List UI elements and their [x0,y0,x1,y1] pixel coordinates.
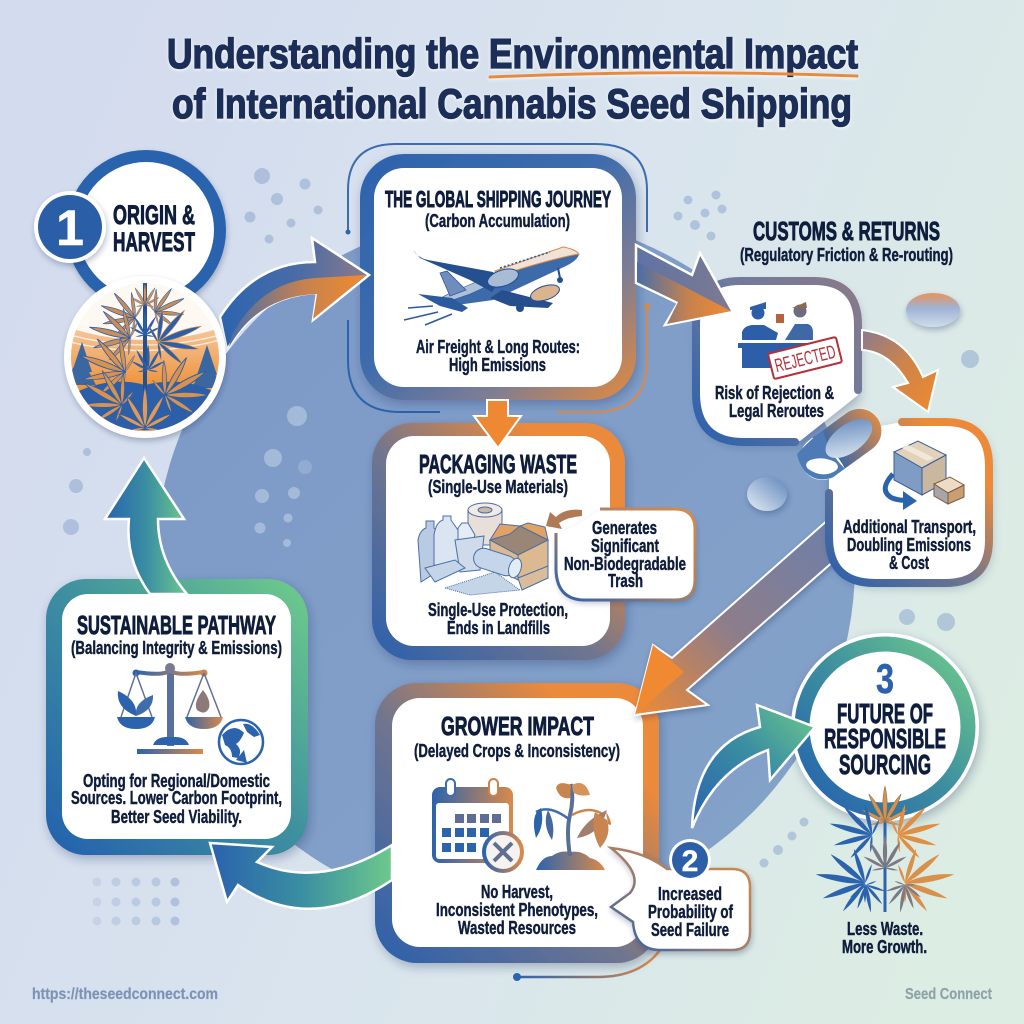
central circle backdrop [155,215,855,915]
heading: grower: GROWER IMPACT [441,711,594,741]
caption: packaging: Ends in Landfills [447,618,550,638]
subheading: shipping: (Carbon Accumulation) [425,211,570,231]
title: Understanding the Environmental Impact [167,30,858,77]
icon: globe [219,720,263,764]
caption: shipping: High Emissions [449,355,546,375]
decorative dots [63,168,979,926]
arrow: grower to future [692,705,815,828]
subheading: packaging: (Single-Use Materials) [428,477,568,497]
panel: additional transport [829,422,989,583]
caption: sustainable: Sources. Lower Carbon Footprint, [71,788,282,808]
decorative blob centre right [747,477,787,511]
badge: number 2: 2 [682,845,698,878]
heading: future: FUTURE OF [837,698,933,729]
callout text: trash [564,518,686,591]
callout text: trash: Trash [608,571,643,591]
heading: future: SOURCING [839,749,931,780]
callout text: seed failure: Increased [658,884,722,904]
caption: packaging: Single-Use Protection, [428,600,568,620]
circle: origin and harvest [34,156,220,304]
connector blob between customs and additional panels [791,400,890,489]
thin line below grower panel [513,950,660,981]
caption: packaging [428,600,568,638]
caption: sustainable [71,771,282,827]
decorative blob upper right [906,293,960,327]
arrow: sustainable to origin [105,458,187,594]
icon: wilted plant [534,783,611,870]
caption: sustainable: Opting for Regional/Domestic [83,771,270,791]
callout: seed failure [611,839,750,950]
number 3: 3 [876,655,894,702]
caption: customs [715,383,834,421]
illustration: cannabis field roundel [64,276,226,440]
caption: grower [436,882,598,938]
panel: sustainable pathway [46,579,308,855]
arrow: shipping to customs [636,245,733,325]
panel: packaging waste [372,423,625,660]
callout text: seed failure [648,884,734,940]
panel: global shipping journey [360,154,636,400]
heading: sustainable: SUSTAINABLE PATHWAY [77,610,276,640]
heading: future: RESPONSIBLE [824,723,946,754]
callout: non-biodegradable trash [546,509,695,600]
arrow: callout pointer [546,510,582,529]
arrow: additional transport to grower [635,518,835,715]
tagline [842,919,927,957]
icon: customs officers at desk [738,302,813,368]
title: of International Cannabis Seed Shipping [172,80,852,127]
tagline: More Growth. [842,937,927,957]
arrow: customs to additional [862,330,938,412]
icon: airplane [404,247,579,325]
title [167,30,858,127]
icon: packaging pile [418,503,548,595]
icon: boxes and return arrow [885,441,964,510]
stamp: rejected: REJECTED [773,342,838,377]
heading: origin: HARVEST [113,227,195,257]
caption: sustainable: Better Seed Viability. [111,807,242,827]
arrow: grower to sustainable [210,843,392,909]
caption: customs: Risk of Rejection & [715,383,834,403]
footer: url: https://theseedconnect.com [32,986,218,1003]
caption: additional transport: Doubling Emissions [847,535,971,555]
tagline: Less Waste. [847,919,923,939]
badge: number 1: 1 [56,200,84,256]
panel: customs and returns [696,216,953,442]
thin bracket lines around shipping panel [346,144,650,412]
icon: balance scale [117,663,223,754]
caption: additional transport: & Cost [889,553,929,573]
icon: calendar [432,779,522,871]
subheading: grower: (Delayed Crops & Inconsistency) [414,741,620,761]
heading: shipping: THE GLOBAL SHIPPING JOURNEY [385,186,611,212]
caption: grower: No Harvest, [481,882,553,902]
callout text: trash: Non-Biodegradable [564,554,686,574]
heading: future [824,698,946,780]
callout text: seed failure: Probability of [648,902,734,922]
dots inside circle [254,406,312,547]
caption: additional transport [843,517,976,573]
caption: grower: Wasted Resources [458,918,576,938]
callout text: trash: Generates [592,518,657,538]
caption: grower: Inconsistent Phenotypes, [436,900,598,920]
subheading: customs: (Regulatory Friction & Re-routing) [740,245,953,265]
caption: additional transport: Additional Transport, [843,517,976,537]
caption: customs: Legal Reroutes [729,401,824,421]
panel: grower impact [375,683,659,963]
footer: brand: Seed Connect [905,986,993,1003]
badge: number 1 [34,191,106,263]
illustration: cannabis plant with tagline [810,786,960,957]
heading: origin: ORIGIN & [113,200,195,230]
arrow: origin to shipping [220,238,369,350]
caption: shipping: Air Freight & Long Routes: [416,337,580,357]
caption: shipping [416,337,580,375]
callout text: seed failure: Seed Failure [651,920,729,940]
subheading: sustainable: (Balancing Integrity & Emissions) [71,638,282,658]
circle: future of responsible sourcing [791,633,979,821]
heading: packaging: PACKAGING WASTE [419,449,577,479]
callout text: trash: Significant [591,536,659,556]
stamp: rejected [768,337,842,379]
arrow: shipping down to packaging [474,400,521,448]
heading: origin [113,200,195,257]
